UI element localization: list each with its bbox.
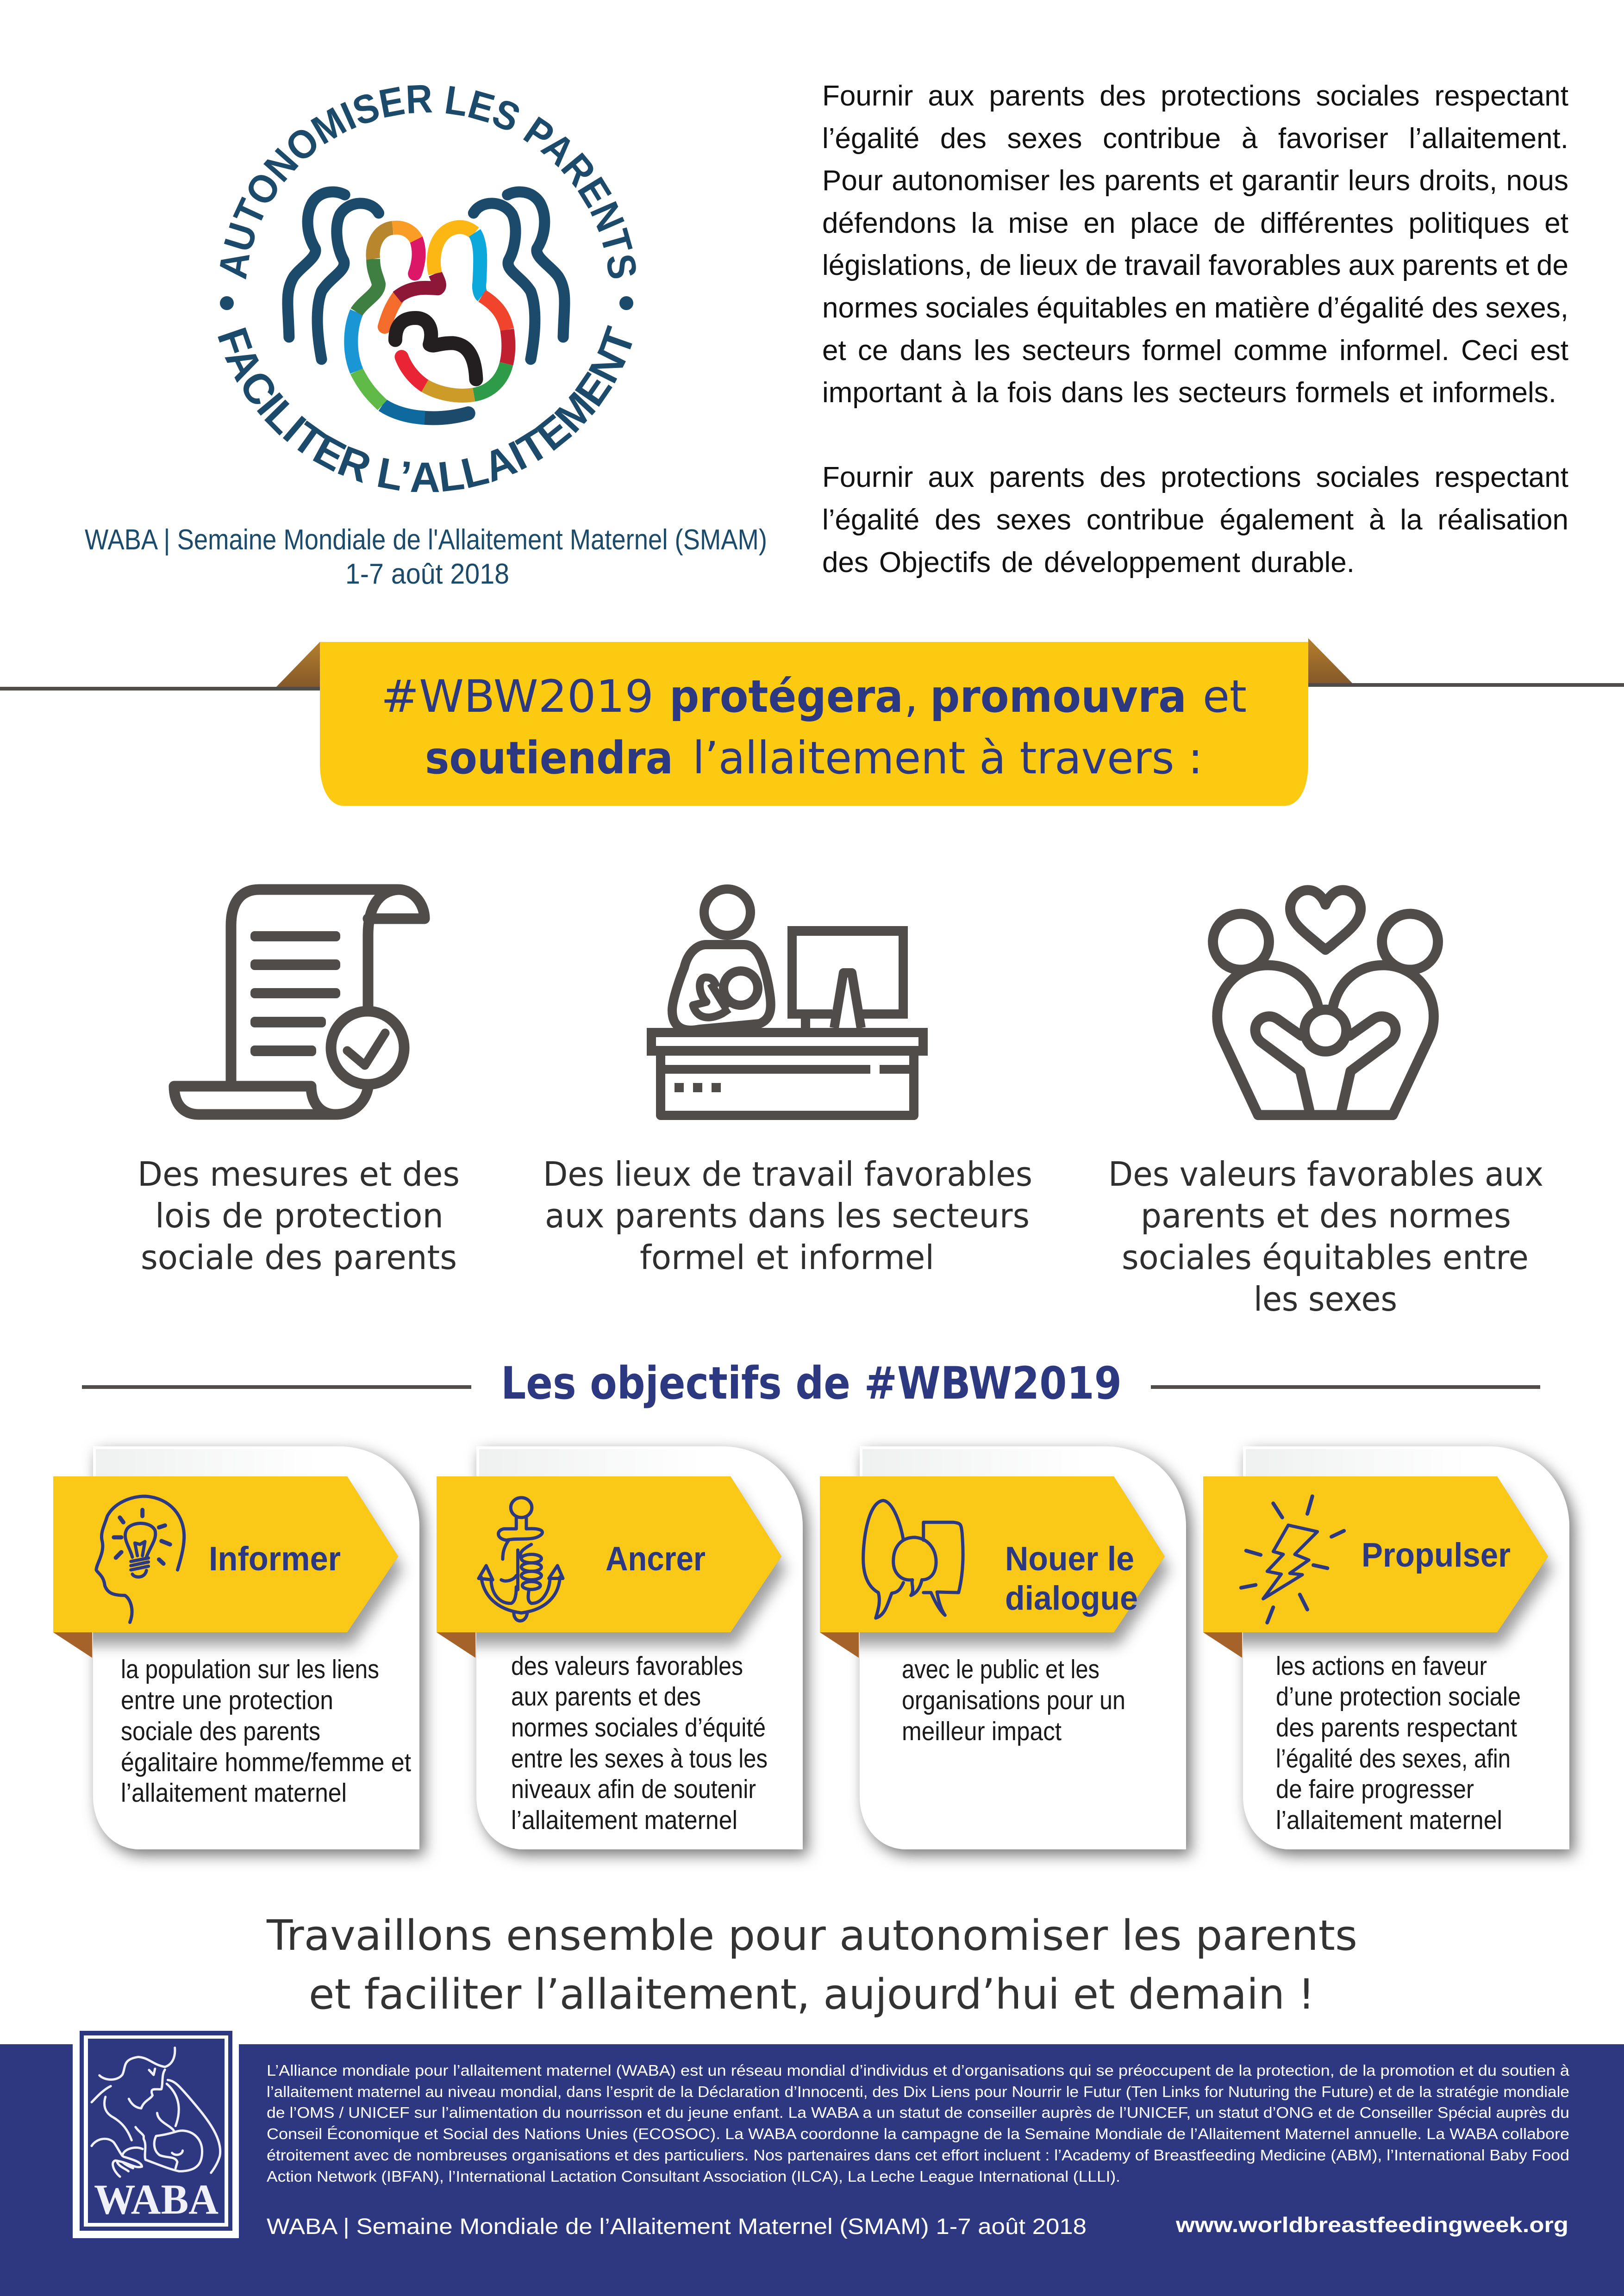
caption: social protection: lois de protection (155, 1196, 443, 1235)
icon: speech bubbles (863, 1500, 963, 1618)
panel: ancrer (437, 1446, 803, 1849)
caption: values and norms: parents et des normes (1141, 1196, 1511, 1235)
text: ancrer body (511, 1651, 768, 1835)
icon: workplace breastfeeding (647, 889, 928, 1115)
text: informer body: sociale des parents (121, 1717, 320, 1746)
text: informer body: la population sur les liens (121, 1655, 379, 1684)
logo caption: 1-7 août 2018 (345, 558, 509, 590)
text: nouer body: avec le public et les (902, 1655, 1099, 1684)
closing statement: Travaillons ensemble pour autonomiser les parents (266, 1911, 1357, 1960)
footer event line: WABA | Semaine Mondiale de l’Allaitement Maternel (SMAM) 1-7 août 2018 (267, 2215, 1087, 2239)
intro text: l’égalité des sexes contribue à favoriser l’allaitement. (822, 123, 1568, 155)
WABA wordmark: WABA (94, 2176, 219, 2223)
label: nouer le dialogue: dialogue (1005, 1580, 1138, 1617)
text: informer body: entre une protection (121, 1686, 333, 1715)
intro text: législations, de lieux de travail favorables aux parents et de (822, 249, 1568, 281)
footer paragraph: l’allaitement maternel au niveau mondial, dans l’esprit de la Déclaration d’Innocenti, des Dix Liens pour Nourrir le Futur (Ten Links for Nuturing the Future) et de la stratégie mondiale (267, 2083, 1569, 2100)
text: informer body: égalitaire homme/femme et (121, 1748, 411, 1777)
intro text: Pour autonomiser les parents et garantir leurs droits, nous (822, 165, 1568, 197)
banner text: protégera (669, 671, 903, 722)
text: ancrer body: normes sociales d’équité (511, 1713, 766, 1742)
icon: lightning bolt (1241, 1496, 1344, 1623)
footer paragraph: Conseil Économique et Social des Nations Unies (ECOSOC). La WABA coordonne la campagne de la Semaine Mondiale de l’Allaitement Maternel annuelle. La WABA collabore (267, 2125, 1569, 2142)
closing statement: et faciliter l’allaitement, aujourd’hui et demain ! (309, 1970, 1315, 2019)
logo caption: WABA | Semaine Mondiale de l'Allaitement Maternel (SMAM) (85, 524, 767, 556)
caption: values and norms: sociales équitables entre (1122, 1238, 1529, 1277)
intro text (822, 75, 1568, 584)
caption: values and norms: les sexes (1254, 1280, 1397, 1319)
label: informer: Informer (209, 1540, 341, 1578)
text: propulser body: d’une protection sociale (1276, 1682, 1521, 1711)
text: propulser body (1276, 1651, 1521, 1835)
banner text: promouvra (930, 671, 1187, 722)
icon: legal document (174, 890, 425, 1114)
caption: values and norms: Des valeurs favorables aux (1108, 1155, 1543, 1194)
caption: social protection (137, 1155, 460, 1277)
closing statement (266, 1911, 1357, 2019)
text: ancrer body: des valeurs favorables (511, 1651, 743, 1681)
logo arc text bottom: FACILITER L’ALLAITEMENT (208, 322, 644, 501)
WABA logo (73, 2031, 239, 2238)
intro text: Fournir aux parents des protections sociales respectant (822, 80, 1568, 112)
footer band (0, 2044, 1624, 2296)
label: propulser: Propulser (1362, 1537, 1511, 1574)
footer paragraph: Action Network (IBFAN), l’International Lactation Consultant Association (ILCA), La Leche League International (LLLI). (267, 2168, 1120, 2185)
intro text: l’égalité des sexes contribue également à la réalisation (822, 504, 1568, 536)
intro text: des Objectifs de développement durable. (822, 547, 1355, 579)
label: ancrer: Ancrer (606, 1540, 706, 1578)
banner fold left (276, 642, 320, 687)
icon: anchor with rope (479, 1498, 563, 1621)
banner fold right (1308, 638, 1352, 683)
text: ancrer body: niveaux afin de soutenir (511, 1774, 756, 1804)
intro text: important à la fois dans les secteurs formels et informels. (822, 377, 1556, 409)
panel: informer (53, 1446, 419, 1849)
text: informer body: l’allaitement maternel (121, 1778, 347, 1808)
text: informer body (121, 1655, 411, 1808)
caption: workplaces: formel et informel (640, 1238, 934, 1277)
icon: head with light bulb (96, 1496, 184, 1622)
caption: values and norms (1108, 1155, 1543, 1319)
footer paragraph: étroitement avec de nombreuses organisations et des particuliers. Nos partenaires dans cet effort incluent : l’Academy of Breastfeeding Medicine (ABM), l’International Baby Food (267, 2147, 1569, 2164)
text: propulser body: des parents respectant (1276, 1713, 1517, 1742)
footer url: www.worldbreastfeedingweek.org (1175, 2213, 1568, 2237)
label: nouer le dialogue: Nouer le (1005, 1540, 1134, 1578)
text: ancrer body: entre les sexes à tous les (511, 1744, 768, 1773)
label: nouer le dialogue (1005, 1540, 1138, 1617)
banner text: , (904, 671, 918, 722)
footer paragraph: L’Alliance mondiale pour l’allaitement maternel (WABA) est un réseau mondial d’individus et d’organisations qui se préoccupent de la protection, de la promotion et du soutien à (267, 2062, 1570, 2079)
banner text (381, 671, 1247, 784)
intro text: défendons la mise en place de différentes politiques et (822, 207, 1568, 239)
mother and child drawing (92, 2048, 220, 2177)
text: ancrer body: aux parents et des (511, 1682, 701, 1711)
caption: social protection: sociale des parents (141, 1238, 457, 1277)
banner text: l’allaitement à travers : (693, 732, 1203, 784)
footer paragraph: de l’OMS / UNICEF sur l’alimentation du nourrisson et du jeune enfant. La WABA a un statut de conseiller auprès de l’UNICEF, un statut d’ONG et de Conseiller Spécial auprès du (267, 2104, 1569, 2121)
caption: workplaces: Des lieux de travail favorables (543, 1155, 1032, 1194)
banner text: soutiendra (425, 732, 673, 784)
section heading: objectives: Les objectifs de #WBW2019 (501, 1357, 1122, 1409)
panel: nouer le dialogue (820, 1446, 1186, 1849)
caption: social protection: Des mesures et des (137, 1155, 460, 1194)
section heading: objectives (82, 1357, 1540, 1409)
footer paragraph (267, 2062, 1570, 2185)
logo caption (85, 524, 767, 590)
banner (0, 638, 1624, 806)
intro text: Fournir aux parents des protections sociales respectant (822, 461, 1568, 493)
intro text: normes sociales équitables en matière d’égalité des sexes, (822, 292, 1568, 324)
caption: workplaces (543, 1155, 1032, 1277)
logo figure (287, 192, 564, 418)
text: propulser body: l’allaitement maternel (1276, 1805, 1502, 1835)
caption: workplaces: aux parents dans les secteurs (545, 1196, 1030, 1235)
text: propulser body: les actions en faveur (1276, 1651, 1487, 1681)
text: propulser body: de faire progresser (1276, 1774, 1474, 1804)
text: ancrer body: l’allaitement maternel (511, 1805, 737, 1835)
banner shape (320, 642, 1308, 806)
text: propulser body: l’égalité des sexes, afin (1276, 1744, 1511, 1773)
intro text: et ce dans les secteurs formel comme informel. Ceci est (822, 335, 1568, 367)
text: nouer body (902, 1655, 1125, 1746)
logo: autonomiser les parents (208, 76, 645, 501)
panel: propulser (1203, 1446, 1569, 1849)
icon: family with heart (1213, 890, 1438, 1115)
text: nouer body: meilleur impact (902, 1717, 1062, 1746)
banner text: #WBW2019 (381, 671, 654, 722)
logo dots (220, 296, 633, 310)
text: nouer body: organisations pour un (902, 1686, 1125, 1715)
logo arc text top: AUTONOMISER LES PARENTS (210, 76, 645, 282)
banner text: et (1203, 671, 1247, 722)
